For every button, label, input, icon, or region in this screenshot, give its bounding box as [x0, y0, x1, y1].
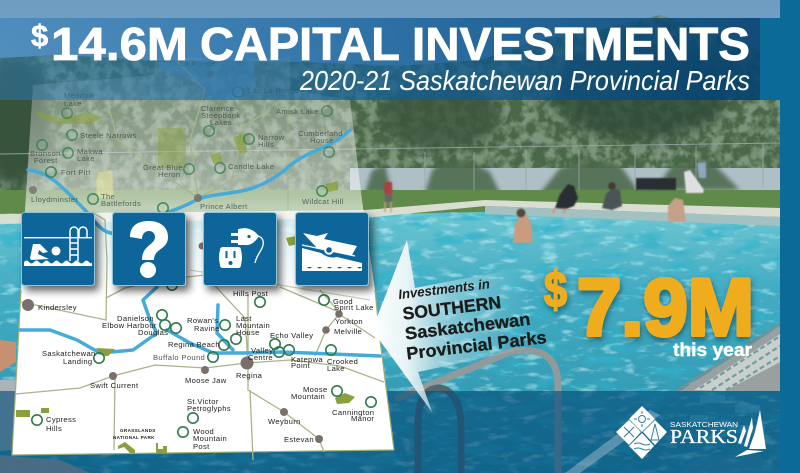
map: southern place names: Yorkton [335, 317, 363, 326]
map: southern place names: Kindersley [38, 303, 77, 312]
map: southern place names: Wood [193, 427, 214, 436]
map: southern place names: Point [291, 361, 311, 370]
map: southern place names: Manor [351, 414, 374, 423]
map: southern place names: Centre [248, 353, 273, 362]
map: northern place names: The [101, 192, 115, 201]
callout arrow [372, 240, 548, 412]
pool ladder rails [398, 350, 558, 473]
logo: Saskatchewan Parks [616, 406, 766, 459]
map: northern place names: Steepbank [201, 111, 240, 120]
provincial map of Saskatchewan [12, 55, 394, 460]
map: rivers [20, 130, 380, 356]
this year label: this year [673, 340, 752, 360]
map: southern place names: Crooked [327, 357, 358, 366]
title: $ [31, 18, 48, 53]
map: northern place names: Makwa [77, 147, 103, 156]
map: northern place names: Candle Lake [228, 162, 274, 171]
bottom translucent band [0, 391, 780, 473]
map: southern place names: Douglas [138, 328, 168, 337]
map: southern place names: Ravine [194, 324, 220, 333]
map: southern place names: Hills [46, 424, 62, 433]
icon: swimming [22, 212, 94, 286]
title band [0, 18, 760, 100]
map: southern place names: Buffalo Pound [153, 353, 205, 362]
map: northern place names: Lake [77, 154, 95, 163]
map: northern place names: Battlefords [101, 199, 141, 208]
map: southern place names: Rowan's [187, 316, 218, 325]
map: southern place names: Danielson [117, 314, 154, 323]
callout text: Saskatchewan [404, 309, 531, 344]
deck tiles inside bottom band [565, 395, 780, 473]
map: town dots [22, 70, 343, 443]
map: southern place names: Cannington [332, 408, 374, 417]
map: northern place names: Steele Narrows [80, 131, 137, 140]
map: northern place names: Lac La Ronge [248, 86, 300, 95]
map: southern place names: Swift Current [90, 381, 139, 390]
map: southern place names: Elbow Harbour [102, 321, 157, 330]
map: southern place names: Mountain [193, 434, 227, 443]
map: park areas [16, 110, 355, 453]
map: northern place names: Wildcat Hill [302, 197, 344, 206]
big amount: $ [544, 262, 567, 318]
subtitle: 2020-21 Saskatchewan Provincial Parks [299, 65, 750, 96]
map: southern place names: Moose Jaw [185, 376, 227, 385]
map: northern place names: House [310, 136, 334, 145]
map: southern place names: House [236, 328, 260, 337]
logo: sail mark [735, 410, 766, 457]
map: northern place names [30, 59, 344, 211]
map: northern place names: Cumberland [298, 129, 343, 138]
pool edge tiles [676, 324, 780, 391]
icon: boat launch [296, 212, 368, 286]
icon: question mark [112, 212, 186, 286]
map: lake La Ronge [155, 58, 255, 100]
callout text: SOUTHERN [401, 292, 502, 324]
map: southern place names: Last [236, 314, 252, 323]
map: northern place names: Amisk Lake [276, 107, 319, 116]
logo: Saskatchewan Parks: PARKS [670, 426, 738, 448]
icon: electrical plug [204, 212, 276, 286]
map: southern place names: NATIONAL PARK [113, 435, 155, 440]
callout text [397, 270, 548, 364]
map: southern place names: Petroglyphs [187, 404, 231, 413]
right side blue bar [760, 0, 800, 473]
title: 14.6M [51, 18, 188, 70]
map: roads [16, 55, 384, 460]
map: northern place names: Bronson [30, 149, 61, 158]
map: northern place names: Fort Pitt [61, 168, 91, 177]
big amount: 7.9M [577, 263, 754, 353]
map: northern place names: Narrow [258, 133, 285, 142]
title: INVESTMENTS [412, 18, 750, 70]
map: southern place names: Katepwa [291, 355, 323, 364]
map: southern place names: GRASSLANDS [120, 428, 156, 433]
map: park markers [32, 87, 376, 437]
map: southern place names: Estevan [284, 435, 314, 444]
callout text: Investments in [397, 276, 491, 302]
map: southern place names: Cypress [46, 415, 76, 424]
map: northern place names: Clarence [201, 104, 234, 113]
map: southern place names: Saskatchewan [42, 349, 96, 358]
map: southern place names: Landing [63, 357, 92, 366]
map: southern place names: Hills Post [233, 289, 269, 298]
map: southern place names: Spirit Lake [334, 303, 374, 312]
map: southern place names: Melville [334, 327, 362, 336]
logo: diamonds [616, 406, 667, 459]
title [31, 18, 750, 70]
map: northern place names: Heron [158, 170, 180, 179]
map: southern place names [38, 289, 374, 451]
map: northern place names: Lloydminster [31, 195, 78, 204]
map: northern place names: Great Blue [143, 163, 183, 172]
map: southern place names: Post [193, 442, 210, 451]
map: northern place names: Prince Albert [200, 202, 248, 211]
map: southern place names: Mountain [291, 392, 325, 401]
map: southern place names: Regina [236, 371, 263, 380]
callout text: Provincial Parks [405, 327, 548, 364]
map: northern place names: Meadow [64, 91, 95, 100]
map: northern place names: Forest [34, 156, 58, 165]
map: northern place names: Lakes [210, 118, 232, 127]
people at the pool [96, 162, 706, 243]
map: southern place names: Lake [327, 364, 345, 373]
map: northern place names: La Ronge [180, 59, 216, 68]
map: southern place names: Regina Beach [168, 340, 220, 349]
map: southern place names: Valley [251, 346, 273, 355]
map: northern place names: Lake [64, 99, 82, 108]
map: southern place names: Weyburn [268, 417, 301, 426]
map: northern place names: Hills [258, 140, 274, 149]
title: CAPITAL [200, 18, 400, 70]
map: southern place names: Good [333, 297, 353, 306]
map: southern place names: Moose [303, 385, 328, 394]
map: southern place names: Echo Valley [270, 331, 313, 340]
map: southern place names: St.Victor [187, 397, 219, 406]
map: southern place names: Mountain [236, 321, 270, 330]
logo: wordmark: SASKATCHEWAN [670, 420, 738, 429]
